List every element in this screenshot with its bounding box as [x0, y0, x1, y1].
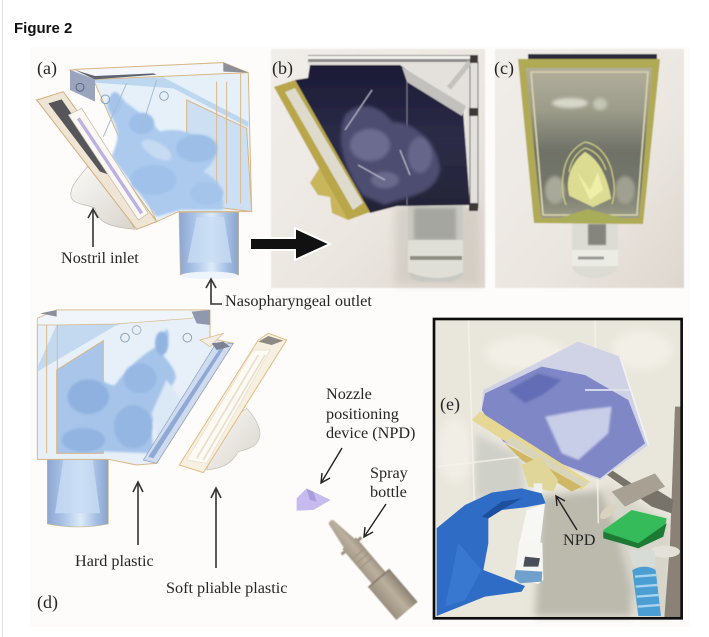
arrow: NPD in photo	[556, 496, 577, 530]
panel c: front photo	[494, 49, 684, 288]
spray bottle e	[534, 483, 542, 497]
arrow: hard plastic	[133, 482, 143, 545]
label e: (e)	[440, 394, 460, 415]
label b: (b)	[272, 58, 293, 79]
turbinate airway a	[107, 92, 223, 217]
arrow: nasopharyngeal outlet	[206, 279, 222, 304]
big arrow between a and b	[250, 228, 330, 260]
dark body b	[295, 65, 470, 213]
title: Figure 2	[14, 20, 72, 37]
icon: spray bottle	[319, 512, 418, 620]
jar b	[408, 206, 463, 282]
panel b: side photo	[271, 49, 485, 288]
panel e: photo of spray test	[434, 319, 682, 618]
yellow panel e	[472, 412, 590, 490]
hard plate d	[143, 343, 233, 463]
label c: (c)	[494, 58, 514, 79]
soft panel a	[37, 92, 157, 229]
label nostril inlet: Nostril inlet	[61, 249, 139, 267]
green filter	[603, 510, 667, 548]
blue cast	[482, 342, 648, 480]
arrow: NPD	[321, 448, 342, 483]
cylinder d	[47, 459, 108, 527]
trapezoid body c	[518, 59, 660, 224]
cylinder a	[179, 212, 239, 278]
panel a: 3D model of nasal cast	[37, 58, 372, 310]
label d: (d)	[37, 592, 58, 613]
label spray bottle: Spray	[370, 464, 409, 482]
photo e	[434, 319, 682, 618]
arrow: nostril inlet	[88, 209, 98, 247]
label soft pliable plastic: Soft pliable plastic	[166, 579, 287, 597]
page edge line	[2, 0, 3, 637]
blue glove	[437, 488, 546, 616]
label nozzle positioning device: Nozzle	[326, 385, 372, 403]
nose c	[562, 142, 614, 205]
nose d	[207, 408, 260, 470]
panel d: exploded 3D model	[37, 310, 418, 620]
airway b	[341, 106, 440, 205]
label nozzle positioning device: device (NPD)	[326, 424, 415, 442]
label NPD: NPD	[563, 531, 596, 549]
label spray bottle: bottle	[370, 483, 407, 501]
blue hose	[632, 567, 661, 616]
yellow panel b	[274, 80, 370, 220]
arrow: spray bottle	[364, 504, 386, 537]
box d	[37, 310, 233, 465]
photo b	[271, 49, 485, 288]
nose b	[310, 167, 348, 220]
label nozzle positioning device: positioning	[326, 405, 399, 423]
turbinate airway d	[61, 328, 187, 453]
soft panel d	[179, 333, 287, 473]
rod and clamp	[664, 407, 681, 618]
nose and NPD e	[522, 457, 558, 492]
clear frame b	[308, 55, 478, 208]
model d drawing	[37, 310, 287, 527]
model a drawing	[37, 63, 252, 279]
nose a	[71, 167, 135, 229]
top bar c	[528, 54, 657, 59]
icon: nozzle positioning device	[297, 488, 331, 511]
label a: (a)	[37, 58, 57, 79]
label nasopharyngeal outlet: Nasopharyngeal outlet	[225, 291, 372, 310]
jar c	[572, 222, 618, 278]
lid a	[95, 77, 248, 127]
base triangle c	[547, 209, 637, 222]
photo c	[495, 49, 684, 288]
label hard plastic: Hard plastic	[75, 552, 154, 570]
box a	[70, 63, 252, 222]
arrow: soft pliable plastic	[211, 488, 221, 568]
